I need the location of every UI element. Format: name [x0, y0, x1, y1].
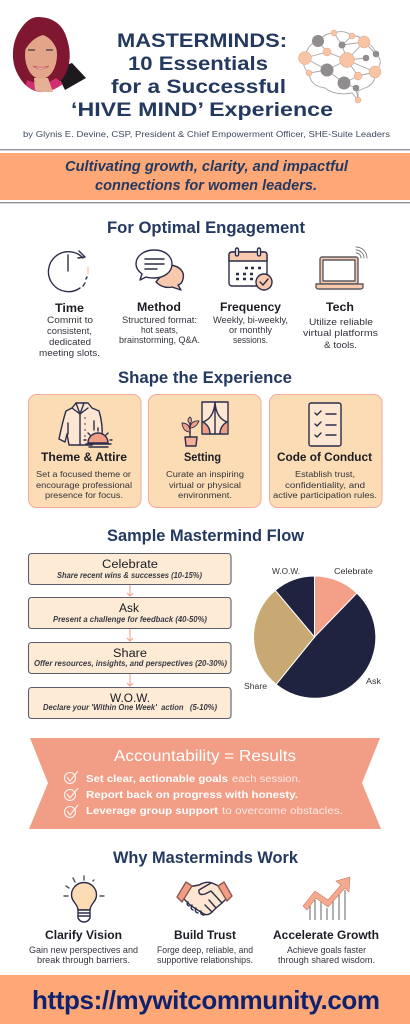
title: for a Successful	[111, 76, 286, 98]
item: Frequency: Frequency	[220, 302, 282, 314]
ribbon: Accountability = Results	[29, 738, 381, 829]
icon: clock	[48, 251, 88, 292]
card: Setting: virtual or physical	[169, 480, 241, 490]
accountability list: Leverage group support	[86, 806, 219, 817]
flow step: W.O.W.: Declare your 'Within One Week' action (5-10%)	[43, 703, 217, 712]
accountability list	[86, 774, 343, 817]
flow step: W.O.W.: W.O.W.	[110, 693, 150, 705]
tagline banner: Cultivating growth, clarity, and impactful	[65, 159, 349, 175]
icon: growth chart	[303, 877, 350, 920]
flow step: W.O.W.	[28, 688, 231, 718]
card: Theme & Attire: encourage professional	[36, 480, 132, 490]
card: Theme & Attire: Set a focused theme or	[36, 469, 131, 479]
tagline banner	[0, 153, 410, 200]
accountability list: each session.	[232, 774, 301, 785]
card: Setting	[148, 394, 261, 508]
flow step: Celebrate: Celebrate	[102, 559, 158, 571]
item: Build Trust: Forge deep, reliable, and	[157, 945, 253, 955]
flow step: Ask	[28, 598, 231, 628]
item: Build Trust: supportive relationships.	[157, 955, 253, 965]
flow step: Celebrate: Share recent wins & successes (10-15%)	[57, 571, 202, 580]
title: MASTERMINDS:	[117, 30, 287, 52]
card: Code of Conduct: Code of Conduct	[277, 452, 372, 464]
item: Clarify Vision: Clarify Vision	[45, 930, 122, 942]
item: Frequency: Weekly, bi-weekly,	[213, 315, 288, 325]
icon: checklist	[309, 403, 341, 446]
heading: Why Masterminds Work	[113, 849, 299, 867]
heading: For Optimal Engagement	[107, 219, 306, 237]
card: Code of Conduct: active participation rules.	[273, 490, 377, 500]
pie chart: Share	[244, 682, 268, 691]
item: Accelerate Growth: through shared wisdom.	[278, 955, 375, 965]
item: Method: hot seats,	[141, 325, 178, 335]
item: Tech: & tools.	[324, 340, 357, 350]
pie chart: W.O.W.	[272, 567, 300, 576]
section: For Optimal Engagement	[39, 219, 379, 358]
card: Code of Conduct: confidentiality, and	[285, 480, 365, 490]
item: Frequency: or monthly	[229, 325, 272, 335]
item: Time: Commit to	[47, 315, 93, 325]
item: Method: brainstorming, Q&A.	[119, 335, 200, 345]
footer banner: https://mywitcommunity.com	[32, 985, 380, 1015]
icon: laptop with wifi	[316, 247, 367, 289]
title	[71, 30, 333, 121]
portrait photo	[13, 17, 86, 92]
card: Setting: Curate an inspiring	[166, 469, 244, 479]
item: Frequency: sessions.	[233, 335, 268, 345]
card: Theme & Attire	[28, 394, 141, 508]
accountability list: to overcome obstacles.	[222, 806, 343, 817]
accountability list: Report back on progress with honesty.	[86, 790, 298, 801]
item: Tech: virtual platforms	[303, 328, 379, 338]
arrow	[127, 585, 133, 596]
item: Build Trust	[157, 882, 253, 965]
card: Theme & Attire: presence for focus.	[45, 490, 123, 500]
icon: shirt with sun	[59, 403, 112, 447]
check icons	[64, 771, 78, 818]
item: Method: Structured format:	[122, 315, 197, 325]
icon: light bulb	[64, 876, 104, 922]
section: Sample Mastermind Flow	[28, 527, 382, 718]
heading: Shape the Experience	[118, 369, 292, 387]
item: Clarify Vision: Gain new perspectives and	[29, 945, 138, 955]
item: Frequency	[213, 248, 288, 345]
item: Time	[39, 251, 100, 358]
card: Setting: environment.	[178, 490, 232, 500]
item: Time: Time	[55, 303, 84, 315]
item: Accelerate Growth: Accelerate Growth	[273, 930, 379, 942]
card: Code of Conduct: Establish trust,	[295, 469, 355, 479]
item: Clarify Vision: break through barriers.	[37, 955, 130, 965]
item: Time: dedicated	[49, 337, 91, 347]
pie chart: Celebrate	[334, 567, 374, 576]
card: Code of Conduct	[270, 394, 382, 508]
section: Shape the Experience	[28, 369, 382, 508]
card: Setting: Setting	[184, 452, 221, 464]
item: Accelerate Growth: Achieve goals faster	[287, 945, 366, 955]
icon: network brain	[298, 30, 381, 103]
item: Accelerate Growth	[273, 877, 379, 965]
item: Clarify Vision	[29, 876, 138, 965]
item: Build Trust: Build Trust	[174, 930, 236, 942]
flow step: Share: Share	[113, 648, 147, 660]
item: Time: meeting slots.	[39, 348, 100, 358]
icon: window and plant	[182, 402, 228, 446]
flow step: Share	[28, 642, 231, 674]
card: Theme & Attire: Theme & Attire	[41, 452, 127, 464]
item: Time: consistent,	[47, 326, 92, 336]
flow step: Share: Offer resources, insights, and perspectives (20-30%)	[34, 659, 227, 668]
item: Method: Method	[137, 302, 181, 314]
icon: calendar	[229, 248, 272, 290]
ribbon heading: Accountability = Results	[114, 748, 296, 765]
arrow	[127, 674, 133, 686]
title: ‘HIVE MIND’ Experience	[71, 99, 333, 121]
icon: handshake	[177, 882, 232, 915]
item: Tech	[303, 247, 379, 350]
pie chart: Ask	[366, 677, 382, 686]
flow step: Ask: Ask	[119, 603, 139, 615]
heading: Sample Mastermind Flow	[107, 527, 304, 545]
header	[13, 17, 390, 139]
section: Why Masterminds Work	[29, 849, 379, 965]
flow step: Ask: Present a challenge for feedback (40-50%)	[53, 615, 207, 624]
pie chart	[244, 567, 382, 698]
flow step: Celebrate	[28, 554, 231, 584]
accountability list: Set clear, actionable goals	[86, 774, 228, 785]
arrow	[127, 629, 133, 641]
item: Tech: Tech	[326, 302, 354, 314]
footer banner	[0, 975, 410, 1024]
icon: speech bubbles	[136, 250, 183, 290]
tagline banner: connections for women leaders.	[95, 178, 317, 194]
item: Method	[119, 250, 200, 345]
item: Tech: Utilize reliable	[309, 317, 373, 327]
byline: by Glynis E. Devine, CSP, President & Chief Empowerment Officer, SHE-Suite Leaders	[23, 129, 390, 139]
title: 10 Essentials	[128, 53, 268, 75]
